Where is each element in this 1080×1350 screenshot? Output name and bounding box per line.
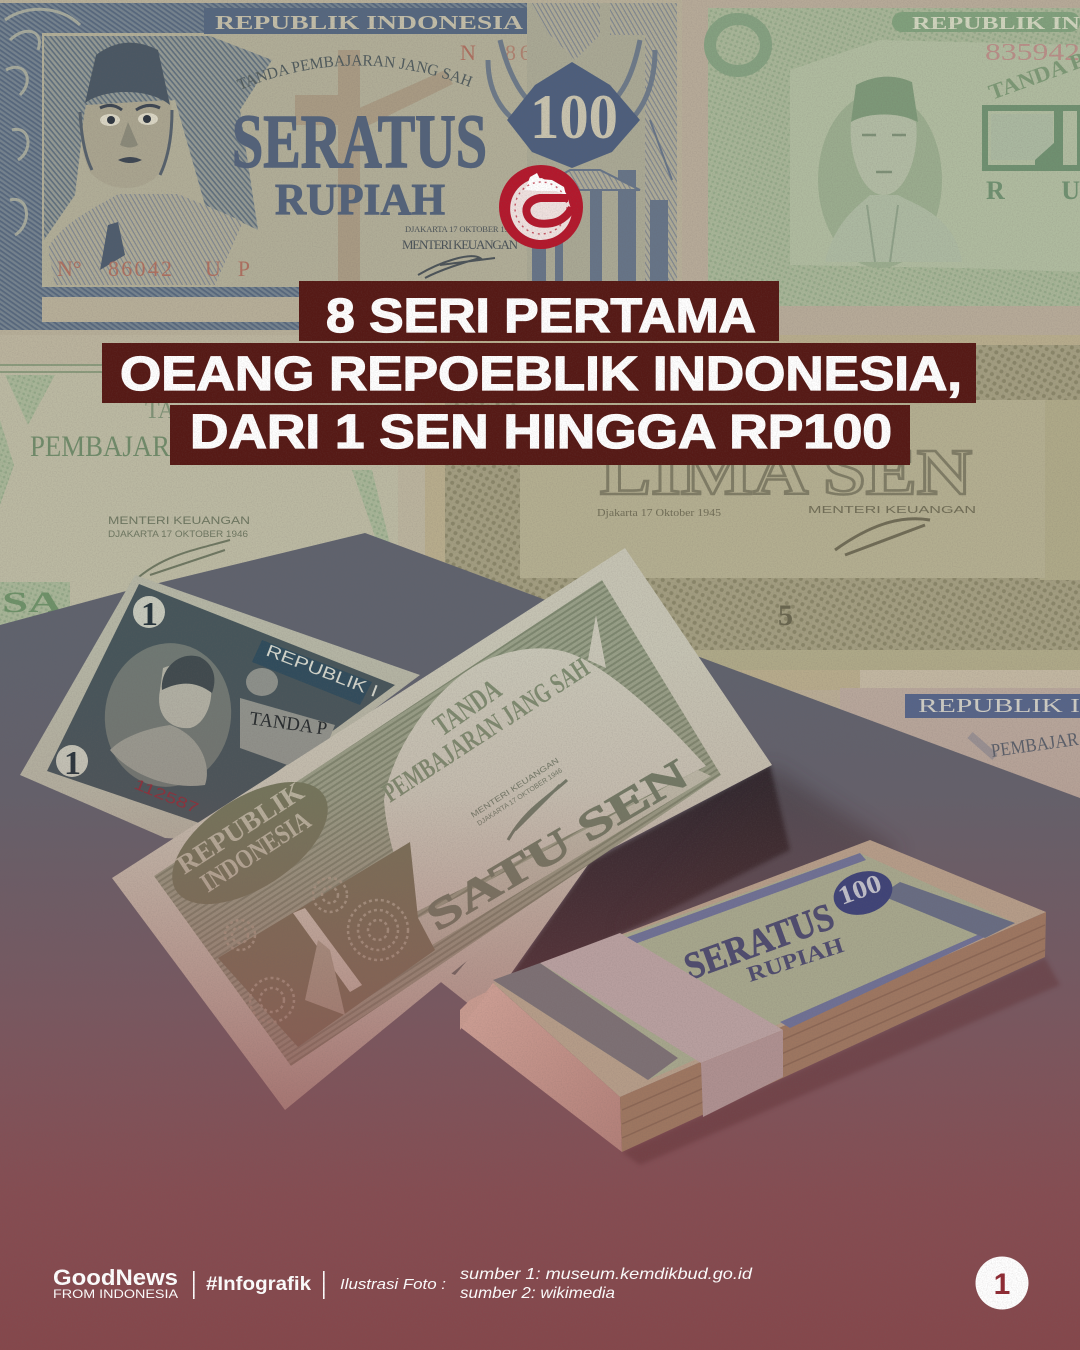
tanda p: TANDA P <box>985 47 1080 105</box>
brand: FROM INDONESIA <box>53 1289 178 1301</box>
minister text: MENTERI KEUANGAN <box>469 756 561 820</box>
medallion 100: 100 <box>530 81 618 152</box>
fold paper piece <box>400 862 590 1005</box>
source 2: sumber 2: wikimedia <box>460 1285 615 1302</box>
oval label: REPUBLIK <box>171 776 309 880</box>
paper band <box>540 933 783 1063</box>
banknote: seratus rupiah: TANDA PEMBAJARAN JANG SAH <box>236 54 473 89</box>
note: satu sen <box>112 548 772 1110</box>
banknote: lima sen <box>425 335 1080 694</box>
hashtag: #Infografik <box>206 1274 311 1295</box>
printed area <box>493 853 1015 1080</box>
note: satu sen: DJAKARTA 17 OKTOBER 1946 <box>476 767 564 828</box>
title line 2: OEANG REPOEBLIK INDONESIA, <box>120 348 962 401</box>
caption: Djakarta 17 Oktober 1945 <box>597 507 722 519</box>
tanda label: TA <box>145 398 176 424</box>
emblem head <box>525 173 566 195</box>
print area <box>154 580 721 1066</box>
oval label <box>152 757 348 929</box>
portrait oval <box>96 635 240 795</box>
numeral 1 upper: 1 <box>141 596 158 633</box>
source 1: sumber 1: museum.kemdikbud.go.id <box>460 1266 753 1283</box>
seratus text: SERATUS <box>679 896 840 988</box>
big LI letters <box>985 106 1080 168</box>
medallion 100: 100 <box>834 868 885 911</box>
oval label: INDONESIA <box>195 805 316 898</box>
serial numbers: 86042 <box>108 256 172 281</box>
medallion 100 <box>507 62 640 168</box>
tanda pembajaran arc text <box>240 65 472 90</box>
banknote: seratus rupiah: REPUBLIK INDONESIA <box>215 12 524 34</box>
tanda text: TANDA <box>427 673 508 743</box>
big numeral ornament <box>218 842 435 1047</box>
stack shadow <box>622 958 1060 1165</box>
numeral 1 lower <box>56 745 88 782</box>
republik label <box>892 12 1080 32</box>
portrait <box>48 43 243 285</box>
serial numbers: N° <box>57 256 82 281</box>
tanda label <box>240 698 335 775</box>
title line 3: DARI 1 SEN HINGGA RP100 <box>190 406 892 459</box>
print area <box>47 584 395 825</box>
banknote: blue lower right: REPUBLIK I <box>918 695 1080 717</box>
top light triangle <box>588 615 606 668</box>
photo credit label: Ilustrasi Foto : <box>340 1276 446 1293</box>
banknote: left green note: SA <box>2 586 63 619</box>
emblem body <box>510 178 572 240</box>
brand <box>53 1265 178 1301</box>
pembajaran label: PEMBAJAR <box>30 430 170 463</box>
banknote: lima puluh green: REPUBLIK IN <box>912 13 1080 33</box>
brand: GoodNews <box>53 1265 178 1290</box>
serial numbers: UP <box>608 40 650 65</box>
republik band: REPUBLIK I <box>264 641 381 701</box>
right face <box>620 912 1046 1152</box>
money stack <box>460 840 1060 1165</box>
paper sheet <box>112 548 772 1110</box>
top face paper <box>493 840 1046 1097</box>
note frame <box>0 3 527 330</box>
note: satu rupiah: TANDA P <box>248 708 328 740</box>
satu sen text: SATU SEN <box>419 751 696 941</box>
arch blank <box>384 648 706 912</box>
banknote: seratus rupiah <box>0 3 677 330</box>
title line 1: 8 SERI PERTAMA <box>326 290 756 343</box>
menteri label: MENTERI KEUANGAN <box>108 515 250 527</box>
right ornament <box>527 3 677 325</box>
banknote: lima puluh green <box>682 0 1080 335</box>
serial numbers <box>57 40 650 281</box>
medallion 100 <box>828 864 898 922</box>
green portrait <box>825 77 962 262</box>
title <box>102 281 976 465</box>
hatched portrait background <box>44 36 272 240</box>
signature text: DJAKARTA 17 OKTOBER 1946 <box>405 224 517 234</box>
slate background surface <box>0 533 1080 1350</box>
page number <box>976 1256 1028 1310</box>
pembajaran text: PEMBAJARAN JANG SAH <box>377 652 595 809</box>
serial numbers: N <box>460 40 476 65</box>
bottom gradient overlay <box>0 650 1080 1350</box>
numeral 5: 5 <box>778 599 793 632</box>
surface shadow <box>500 765 790 990</box>
logo <box>499 165 583 249</box>
watermark cross <box>295 50 453 285</box>
rupiah text: RUPIAH <box>744 932 847 987</box>
page number: 1 <box>994 1268 1010 1301</box>
left face <box>460 983 622 1152</box>
banknote: seratus rupiah: MENTERI KEUANGAN <box>402 237 519 252</box>
rupiah heading: RUPIAH <box>275 175 445 224</box>
banknote: left green note <box>0 335 425 630</box>
republik band <box>252 640 381 705</box>
serial: 835942 <box>985 40 1080 66</box>
serial: 112587 <box>132 776 201 817</box>
serial numbers: UP <box>205 256 250 281</box>
note: satu rupiah <box>20 575 420 840</box>
banknote: lima sen: MENTERI KEUANGAN <box>808 505 976 516</box>
lima sen text: LIMA SEN <box>600 436 972 509</box>
seratus heading: SERATUS <box>232 100 487 184</box>
numeral 1 lower: 1 <box>64 745 81 782</box>
numeral 1 upper <box>133 596 165 633</box>
banknote: blue lower right <box>840 688 1080 798</box>
serial numbers: 86042 <box>505 40 575 65</box>
footer <box>53 1256 1028 1310</box>
banknote: left green note: DJAKARTA 17 OKTOBER 1946 <box>108 529 248 539</box>
sen band <box>418 770 711 945</box>
ru letters: R U <box>986 176 1080 205</box>
